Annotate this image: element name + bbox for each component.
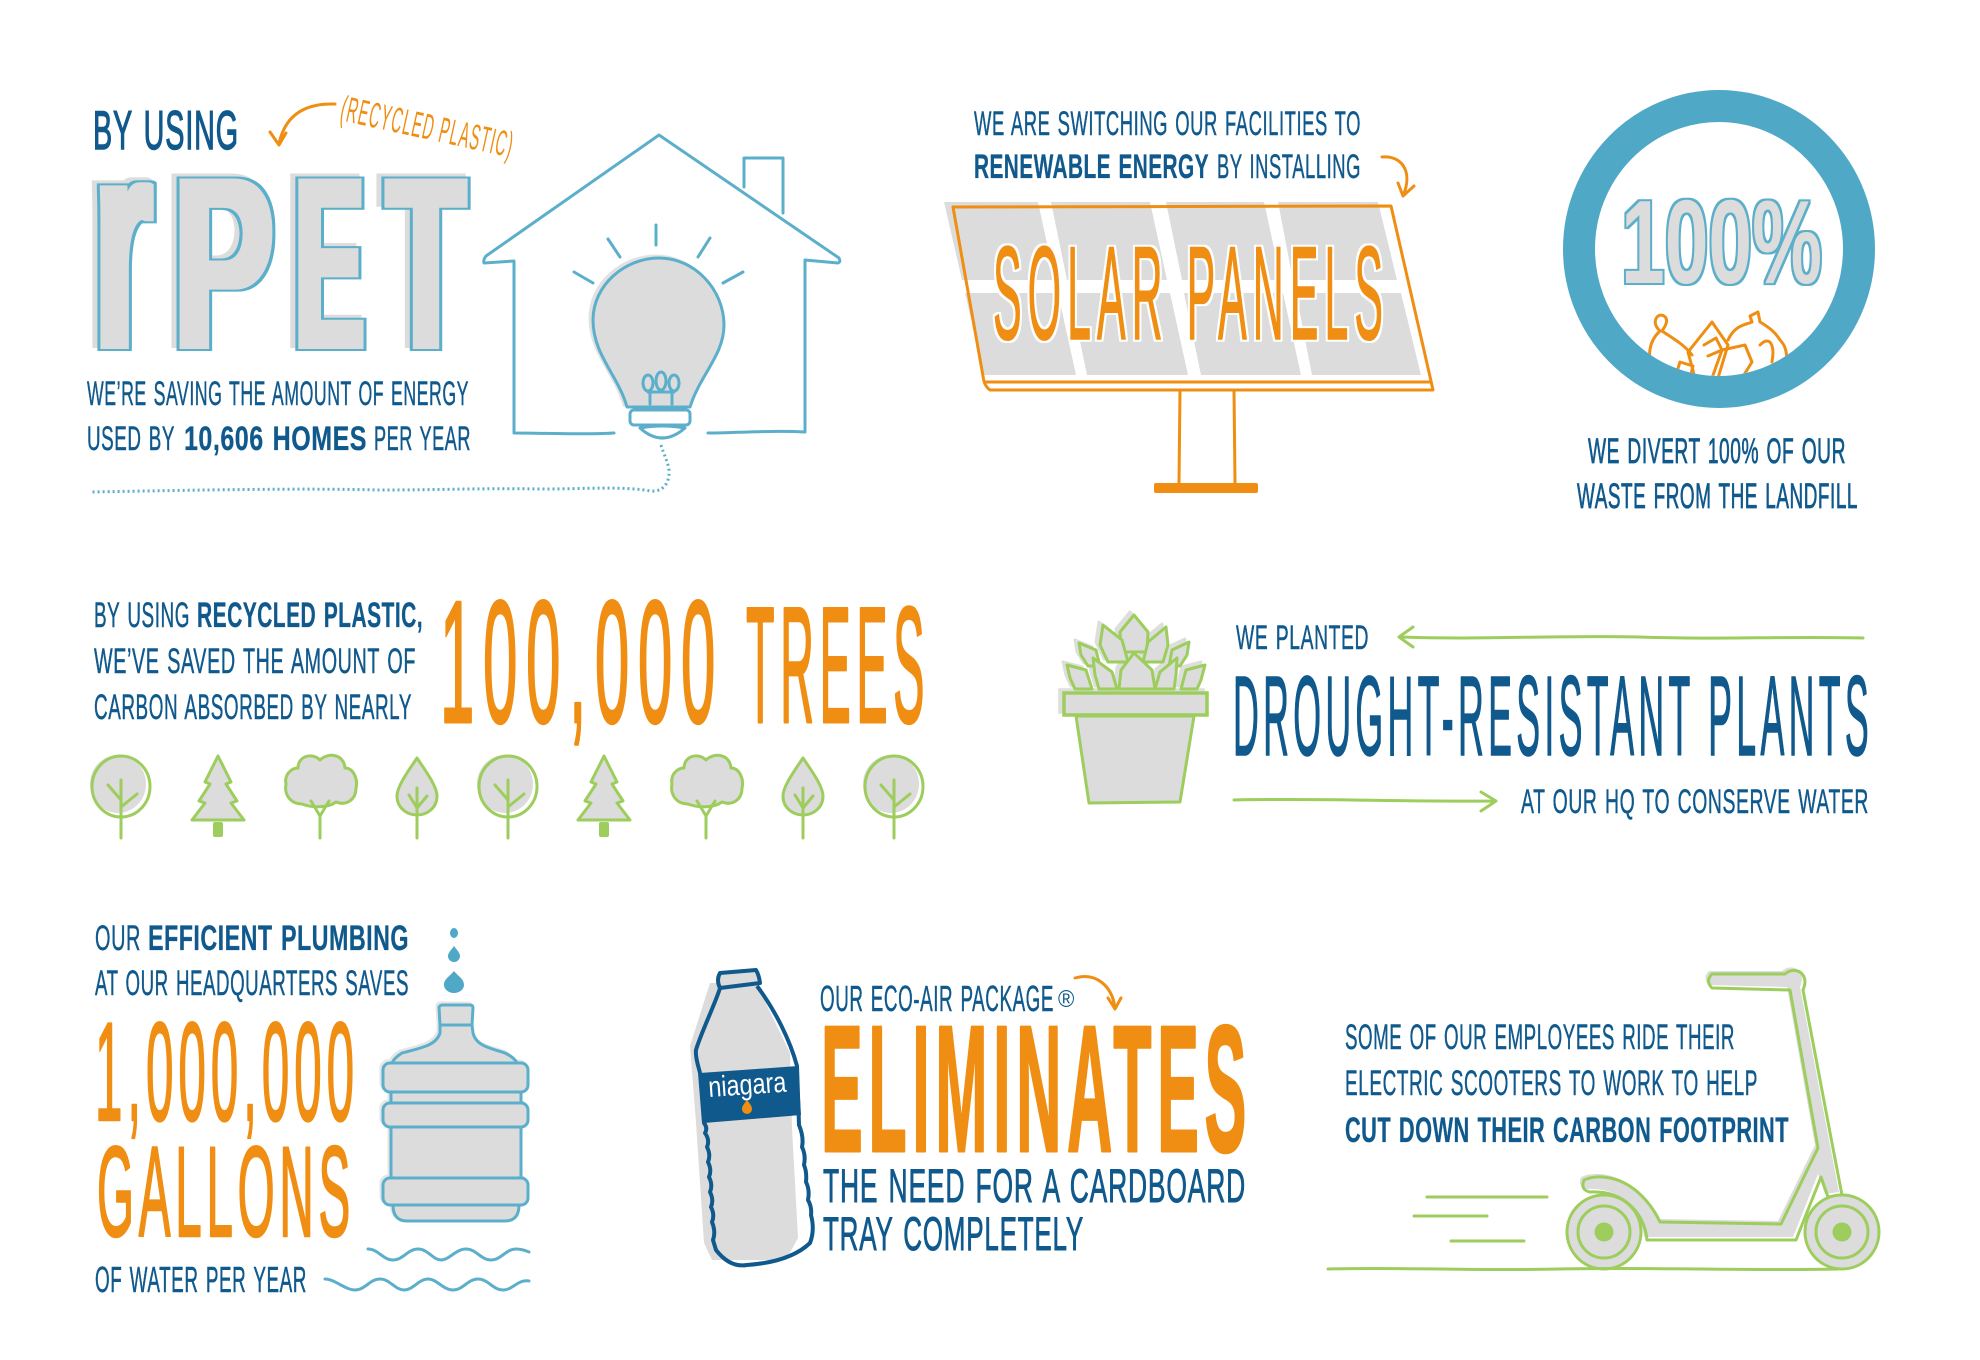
icon: teal ring <box>1579 106 1859 392</box>
panel: landfill diversion <box>1577 106 1859 516</box>
text: the need for a cardboard tray: THE NEED FOR A CARDBOARD <box>823 1159 1246 1212</box>
panel: 100,000 trees <box>90 564 930 838</box>
text: efficient plumbing <box>95 919 409 1003</box>
icon: water bottle: niagara <box>707 1067 788 1104</box>
text: saving energy: PER YEAR <box>374 420 471 458</box>
text: switching to renewable energy: BY INSTALLING <box>1217 148 1361 186</box>
icon: water jug <box>383 1005 528 1221</box>
panel: efficient plumbing <box>95 919 529 1300</box>
icon: house outline <box>484 135 840 434</box>
text: efficient plumbing: OUR <box>95 919 141 958</box>
panel: efficient plumbing: GALLONS <box>97 1121 355 1264</box>
icon: trash pile <box>1650 312 1787 378</box>
arrow: pointing left <box>1399 627 1863 647</box>
big word rPET: T <box>387 126 465 400</box>
text: saving energy: USED BY <box>87 420 175 458</box>
text: carbon saved: CARBON ABSORBED BY NEARLY <box>94 688 412 727</box>
ground line and speed lines <box>1328 1197 1838 1270</box>
panel: efficient plumbing: 1,000,000 <box>95 993 359 1150</box>
text: TREES <box>746 573 930 757</box>
solar panel frame <box>953 206 1433 390</box>
text: switching to renewable energy: WE ARE SWITCHING OUR FACILITIES TO <box>974 105 1361 143</box>
panel: solar panels <box>944 105 1433 493</box>
text: the need for a cardboard tray: TRAY COMPLETELY <box>823 1207 1084 1260</box>
text: carbon saved: RECYCLED PLASTIC, <box>197 596 423 635</box>
text: carbon saved: BY USING <box>94 596 190 635</box>
big word rPET: r <box>94 71 152 413</box>
icon: water bottle <box>690 970 813 1265</box>
text: switching to renewable energy <box>974 105 1361 186</box>
icon: row of trees <box>90 755 923 838</box>
icon: light bulb <box>574 225 743 438</box>
big word rPET: P <box>174 126 274 400</box>
panel: eco-air package <box>690 970 1252 1265</box>
dotted power cord <box>91 445 669 492</box>
icon: water drops <box>444 928 464 993</box>
panel: rPET saves energy: (RECYCLED PLASTIC) <box>337 88 518 165</box>
big word rPET: E <box>296 126 364 400</box>
text: saving energy: 10,606 HOMES <box>184 420 367 458</box>
icon: potted succulent <box>1064 615 1207 803</box>
panel: rPET saves energy <box>87 71 840 492</box>
text: carbon saved <box>94 596 423 727</box>
solar panel stand <box>1154 390 1258 493</box>
text: efficient plumbing: AT OUR HEADQUARTERS SAVES <box>95 964 409 1003</box>
heading: by using: BY USING <box>93 99 239 161</box>
text: switching to renewable energy: RENEWABLE ENERGY <box>974 148 1209 186</box>
arrow: note to heading <box>270 104 335 145</box>
headline: 100,000 trees: 100,000 <box>440 564 724 759</box>
solar panel grey cells <box>944 202 1421 375</box>
text: of water per year: OF WATER PER YEAR <box>95 1259 307 1300</box>
text: we planted: WE PLANTED <box>1236 619 1369 657</box>
panel: electric scooters <box>1328 967 1879 1270</box>
text: the need for a cardboard tray <box>823 1159 1246 1260</box>
decoration: water waves <box>325 1249 529 1290</box>
panel: drought-resistant plants <box>1064 615 1873 821</box>
text: carbon saved: WE’VE SAVED THE AMOUNT OF <box>94 642 416 681</box>
text: employees ride scooters <box>1345 1018 1789 1150</box>
arrow: pointing right <box>1234 792 1496 811</box>
text: saving energy: WE’RE SAVING THE AMOUNT OF ENERGY <box>87 375 469 413</box>
arrow: down to panel <box>1382 157 1414 196</box>
icon: electric scooter <box>1567 967 1879 1269</box>
text: efficient plumbing: EFFICIENT PLUMBING <box>148 919 409 958</box>
headline: 1,000,000 gallons <box>95 993 359 1264</box>
big word rPET <box>94 71 465 413</box>
text: divert waste <box>1577 432 1858 516</box>
text: our eco-air package: OUR ECO-AIR PACKAGE <box>820 978 1054 1019</box>
arrow: down to headline <box>1075 977 1121 1009</box>
text: our eco-air package: ® <box>1058 986 1075 1013</box>
stat: 100%: 100% <box>1621 176 1822 309</box>
text: saving energy <box>87 375 471 458</box>
headline: 100,000 trees <box>440 564 930 759</box>
text: our eco-air package <box>820 978 1075 1019</box>
